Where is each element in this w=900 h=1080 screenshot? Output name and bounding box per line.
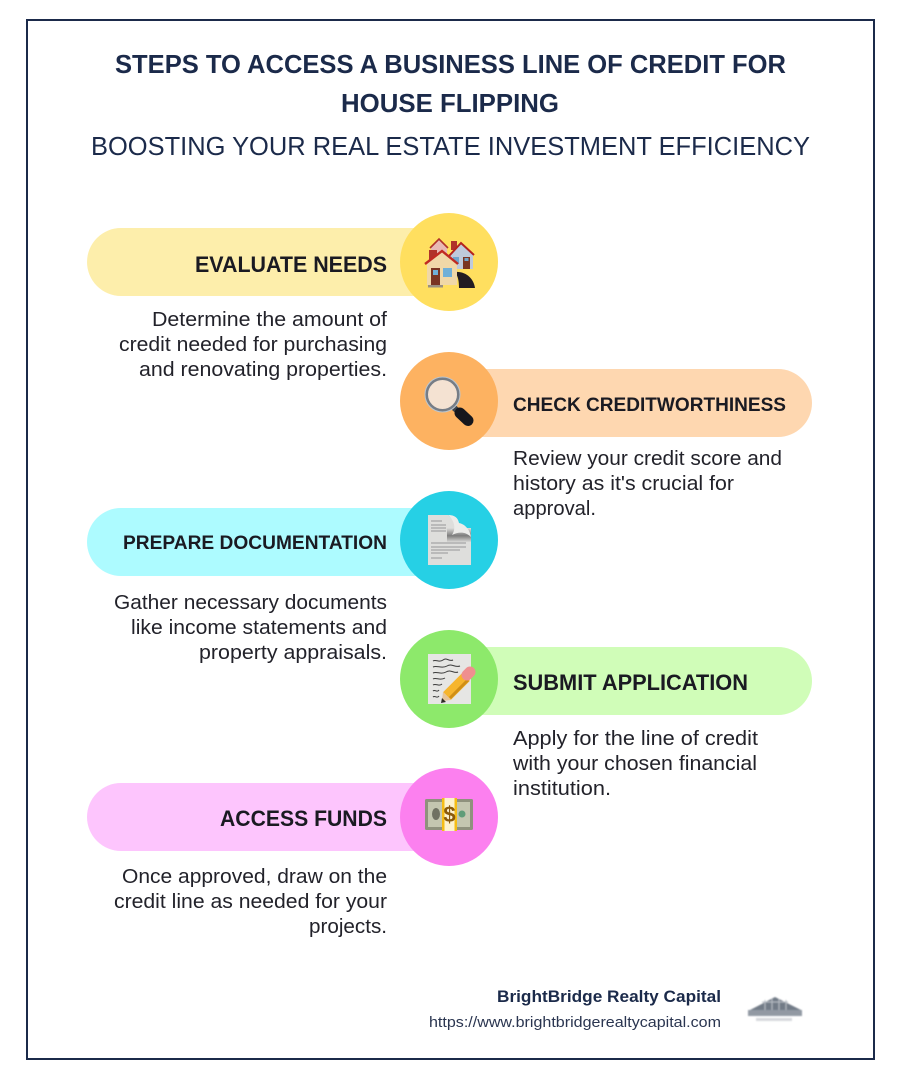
step 3: prepare documentation [87,491,498,589]
step 2 heading: CHECK CREDITWORTHINESS [513,395,786,416]
step 5 circle [400,768,498,866]
step 5 description: credit line as needed for your [114,891,387,913]
step 3 circle [400,491,498,589]
step 4 description: Apply for the line of credit [513,728,758,750]
step 5 pill [87,783,450,851]
step 5 heading: ACCESS FUNDS [220,806,387,831]
footer logo [748,997,802,1021]
step 2 description [513,448,782,520]
step 4 heading: SUBMIT APPLICATION [513,670,748,695]
step 2 pill [449,369,812,437]
step 4: submit application [400,630,812,728]
step 4 circle [400,630,498,728]
step 2 description: history as it's crucial for [513,473,734,495]
icon: document [428,515,471,565]
step 3 description: like income statements and [131,617,387,639]
step 5: access funds [87,768,498,866]
step 4 description: institution. [513,778,611,800]
step 1 pill [87,228,450,296]
step 1 description: and renovating properties. [139,359,387,381]
step 3 heading: PREPARE DOCUMENTATION [123,533,387,554]
step 3 description: property appraisals. [199,642,387,664]
step 1: evaluate needs [87,213,498,311]
step 1 description [119,309,387,381]
icon: houses [425,239,475,288]
step 1 heading: EVALUATE NEEDS [195,252,387,277]
title [115,49,786,118]
title: STEPS TO ACCESS A BUSINESS LINE OF CREDIT FOR [115,49,786,79]
step 3 pill [87,508,450,576]
step 1 circle [400,213,498,311]
step 3 description [114,592,387,664]
step 2: check creditworthiness [400,352,812,450]
step 1 description: Determine the amount of [152,309,387,331]
step 5 description: projects. [309,916,387,938]
step 2 circle [400,352,498,450]
step 4 pill [449,647,812,715]
step 4 description: with your chosen financial [512,753,757,775]
title: HOUSE FLIPPING [341,88,559,118]
footer brand name: BrightBridge Realty Capital [497,987,721,1006]
icon: memo and pencil [428,654,471,704]
step 1 description: credit needed for purchasing [119,334,387,356]
step 5 description: Once approved, draw on the [122,866,387,888]
icon: banknotes: $ [443,802,456,827]
icon: magnifying glass [425,377,468,420]
step 5 description [114,866,387,938]
step 4 description [512,728,758,800]
footer url: https://www.brightbridgerealtycapital.com [429,1015,721,1031]
step 2 description: approval. [513,498,596,520]
subtitle: BOOSTING YOUR REAL ESTATE INVESTMENT EFFICIENCY [91,131,810,161]
icon: banknotes [425,798,473,831]
step 3 description: Gather necessary documents [114,592,387,614]
step 2 description: Review your credit score and [513,448,782,470]
